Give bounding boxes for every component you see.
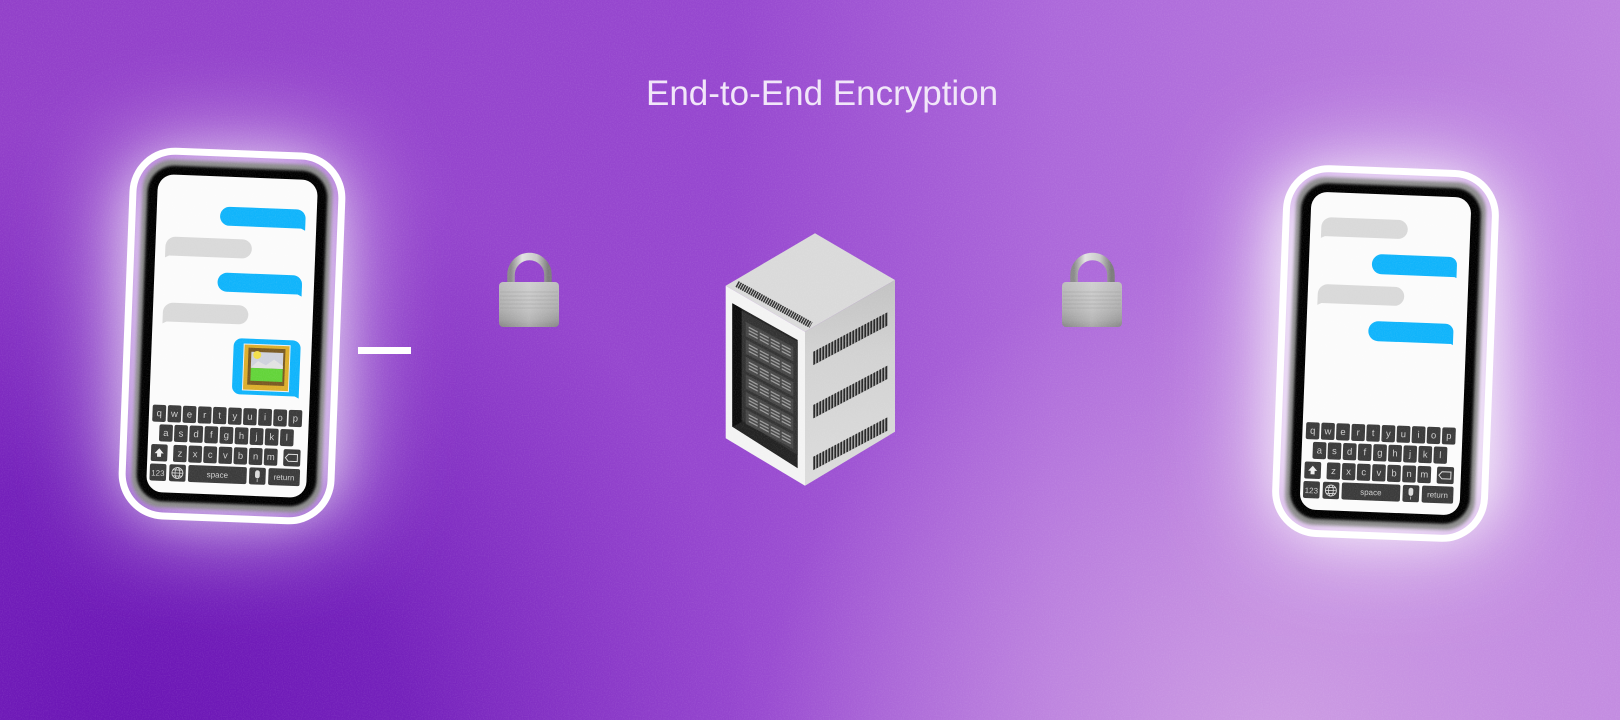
keyboard: return [1427,490,1448,500]
keyboard: o [1431,430,1437,442]
keyboard: 123 [1305,486,1319,496]
left phone [121,150,343,522]
keyboard: l [1439,450,1442,461]
server rack [726,233,895,486]
keyboard: m [267,452,275,463]
keyboard: j [254,431,258,443]
keyboard: v [1376,468,1382,479]
keyboard: c [208,450,213,461]
keyboard: d [1347,447,1353,458]
right face [805,280,895,486]
keyboard: r [203,410,206,421]
keyboard: m [1420,469,1429,481]
keyboard: e [1340,427,1346,438]
rack panel [742,311,798,455]
keyboard: o [277,413,283,424]
received bubble [162,302,249,327]
keyboard [149,404,302,486]
keyboard: n [1406,469,1412,480]
keyboard [1303,422,1456,504]
keyboard: f [210,430,213,441]
keyboard: n [253,451,258,463]
keyboard: e [187,409,192,421]
keyboard: w [1323,426,1332,437]
sent bubble [220,206,306,231]
sent bubble [1368,321,1454,345]
keyboard: 123 [151,469,165,478]
keyboard: d [193,429,199,440]
side vent: bottom [813,424,888,463]
phone bezel [1284,176,1487,531]
keyboard: y [232,411,238,422]
front face [726,286,805,486]
keyboard: s [178,429,184,440]
keyboard: y [1386,429,1391,440]
keyboard: g [224,430,229,441]
connector dash [358,347,411,354]
server units [746,322,793,449]
sent bubble [1372,254,1457,278]
right phone [1274,167,1497,540]
icon: left padlock [499,256,559,327]
keyboard: a [163,428,169,439]
keyboard: a [1317,445,1323,457]
top vent [737,284,811,325]
received bubble [165,236,252,261]
glow: right phone [1265,165,1505,543]
keyboard: r [1356,427,1360,439]
keyboard: p [293,413,298,425]
keyboard: q [156,408,162,419]
keyboard: b [1391,468,1397,480]
keyboard: t [1372,428,1375,439]
keyboard: x [193,449,198,460]
keyboard: h [1392,448,1398,460]
keyboard: j [1408,449,1411,460]
keyboard: h [239,431,244,442]
sent bubble [217,272,302,297]
keyboard: z [177,449,183,460]
side vent: top [813,319,888,358]
keyboard: c [1361,467,1367,478]
phone outline [1274,167,1497,540]
keyboard: u [247,412,253,423]
side vent: middle [813,372,888,412]
keyboard: z [1331,466,1336,477]
keyboard: i [1417,430,1420,441]
received bubble [1317,284,1405,308]
keyboard: x [1346,467,1351,478]
keyboard: i [264,412,266,423]
keyboard: w [170,409,178,420]
keyboard: l [286,433,288,444]
top face [726,233,895,332]
keyboard: space [1360,488,1382,497]
keyboard: b [238,451,243,462]
phone screen [146,174,318,498]
keyboard: q [1310,426,1316,437]
keyboard: return [273,473,295,482]
rack opening [732,303,798,468]
keyboard: v [223,450,228,461]
image message bubble [232,338,301,399]
keyboard: space [207,470,229,480]
keyboard: g [1377,448,1383,459]
keyboard: p [1446,431,1452,442]
rack interior shadow [732,303,742,427]
title: End-to-End Encryption [646,74,998,113]
phone screen [1299,192,1472,515]
keyboard: k [269,432,275,443]
keyboard: u [1401,429,1406,440]
keyboard: t [218,411,222,422]
phone bezel [130,158,334,514]
keyboard: f [1363,447,1367,458]
keyboard: k [1423,450,1428,461]
keyboard: s [1332,446,1337,457]
received bubble [1321,217,1408,241]
icon: right padlock [1062,256,1122,327]
glow: left phone [115,150,350,525]
phone outline [121,150,343,522]
